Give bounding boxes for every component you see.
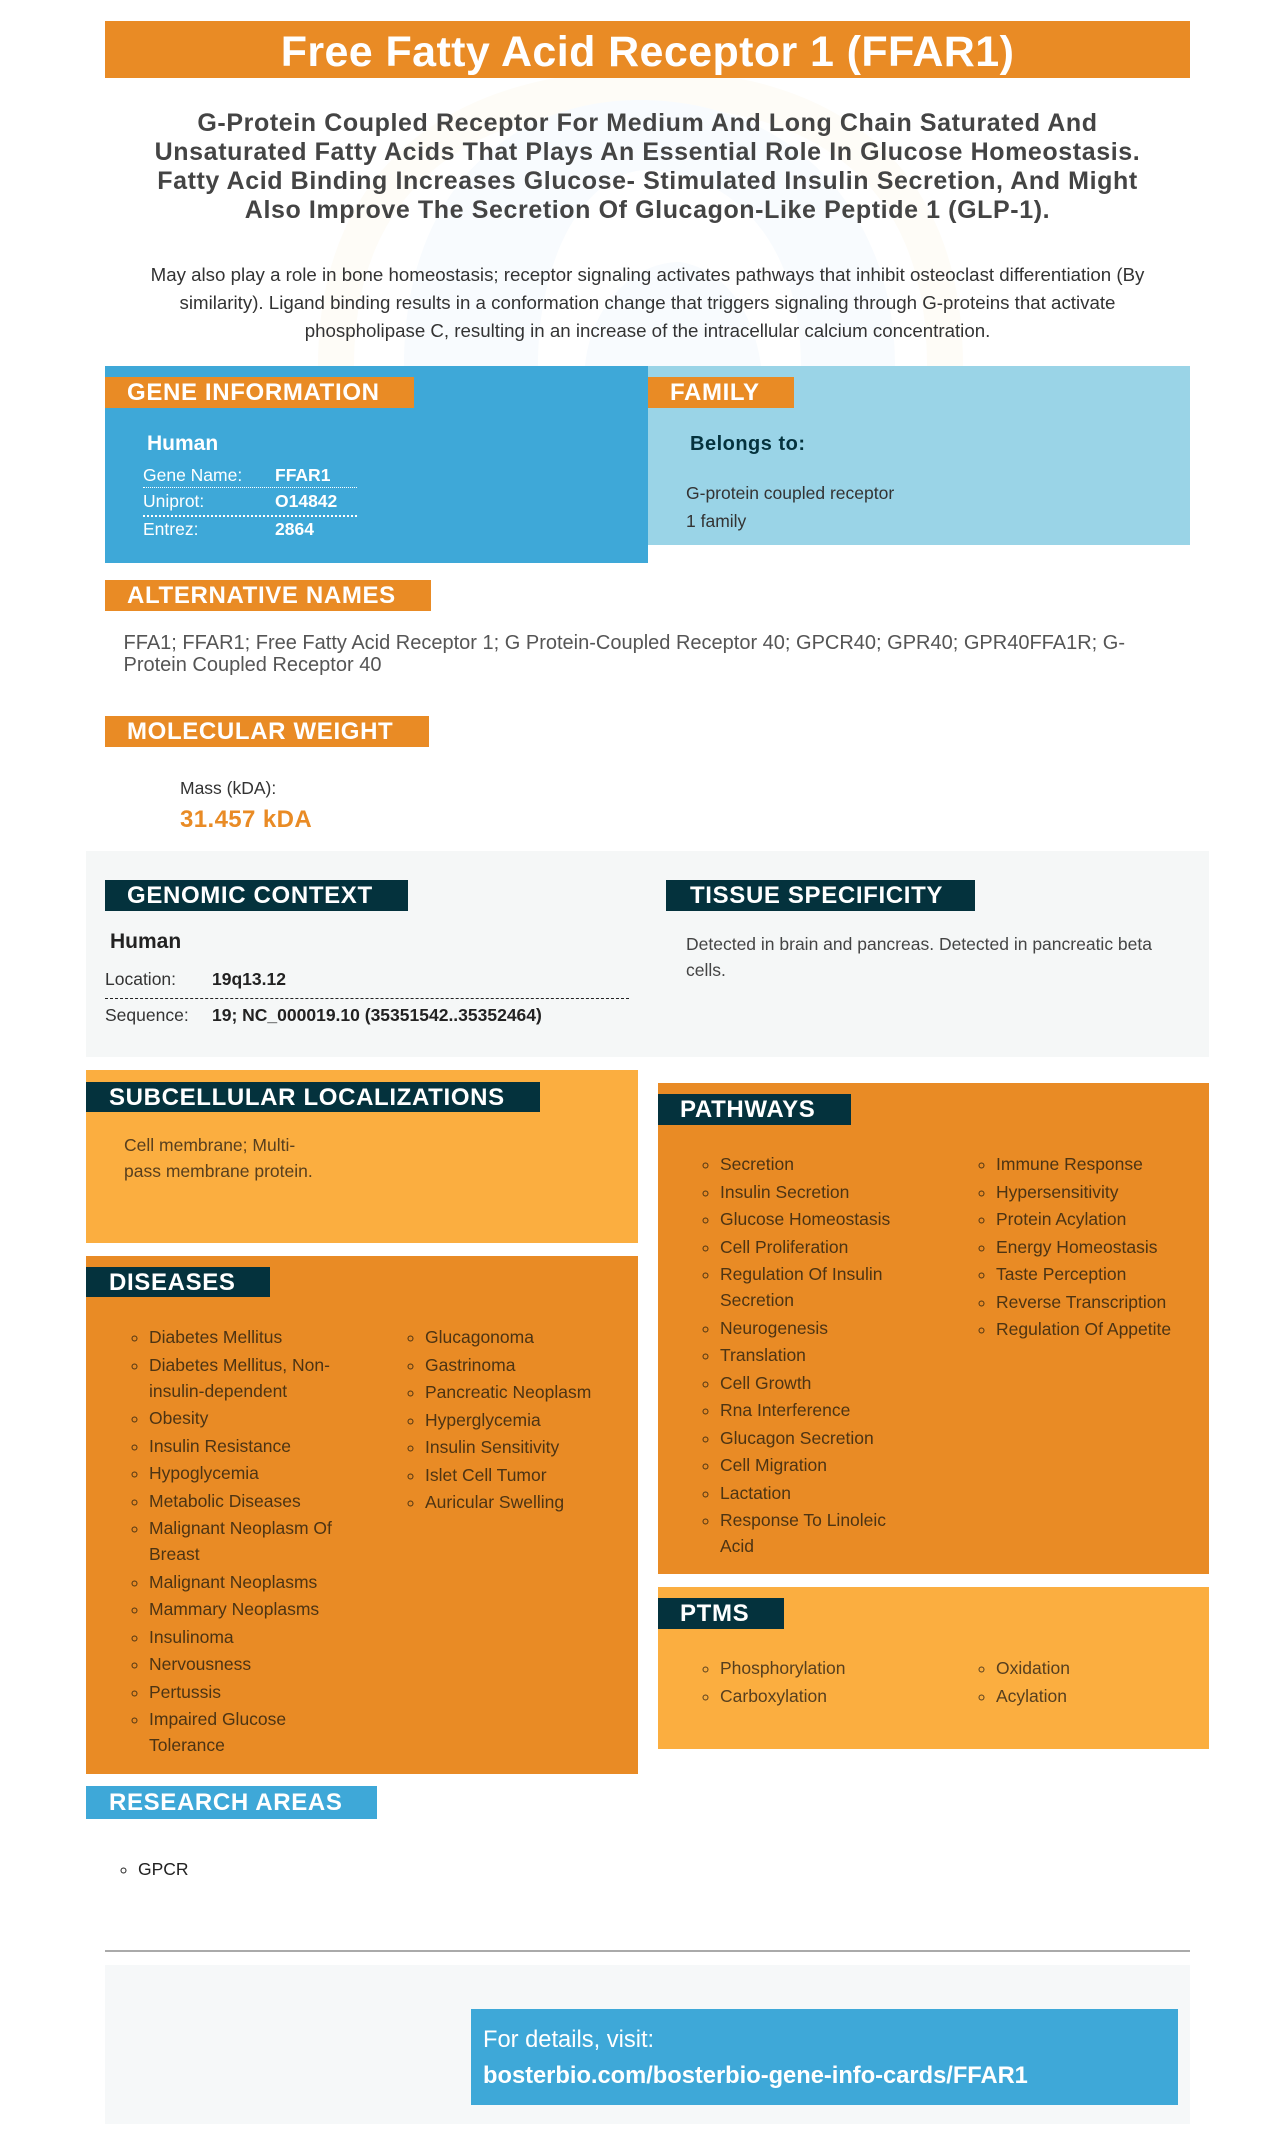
tissue specificity text: cells.	[686, 960, 726, 980]
location row: 19q13.12	[212, 969, 286, 989]
heading: pathways: PATHWAYS	[680, 1096, 815, 1123]
belongs to label: Belongs to:	[690, 433, 806, 455]
heading: research areas	[86, 1786, 377, 1819]
title banner	[105, 21, 1190, 78]
heading: genomic context: GENOMIC CONTEXT	[127, 882, 373, 909]
pathway list column 1: Regulation Of Insulin	[720, 1264, 882, 1284]
disease list column 1: Pertussis	[149, 1682, 221, 1702]
disease list column 1: Tolerance	[149, 1735, 225, 1755]
pathway list column 1: Neurogenesis	[720, 1318, 828, 1338]
family text: G-protein coupled receptor	[686, 483, 894, 503]
disease list column 1: Breast	[149, 1544, 200, 1564]
gene name row: Gene Name:	[143, 465, 242, 485]
pathway list column 2	[978, 1154, 1171, 1339]
function description	[151, 264, 1144, 341]
localization text: Cell membrane; Multi-	[124, 1135, 295, 1155]
disease list column 2: Islet Cell Tumor	[425, 1464, 547, 1484]
sequence row: Sequence:	[105, 1005, 189, 1025]
disease list column 1: Diabetes Mellitus, Non-	[149, 1354, 330, 1374]
pathway list column 1: Acid	[720, 1536, 754, 1556]
heading: subcellular localizations: SUBCELLULAR LOCALIZATIONS	[109, 1084, 505, 1111]
panel: ptms	[658, 1587, 1209, 1749]
disease list column 2: Gastrinoma	[425, 1354, 515, 1374]
disease list column 2: Insulin Sensitivity	[425, 1437, 559, 1457]
uniprot row: O14842	[275, 491, 337, 511]
family text: 1 family	[686, 511, 746, 531]
pathway list column 1: Rna Interference	[720, 1400, 850, 1420]
sequence row	[105, 1005, 542, 1025]
subtitle summary: G-Protein Coupled Receptor For Medium And Long Chain Saturated And	[197, 108, 1098, 136]
pathway list column 1: Response To Linoleic	[720, 1510, 886, 1530]
pathway list column 2: Protein Acylation	[996, 1209, 1126, 1229]
alternative names text	[124, 632, 1125, 676]
panel: footer	[105, 1965, 1190, 2124]
pathway list column 2: Immune Response	[996, 1154, 1143, 1174]
disease list column 2: Pancreatic Neoplasm	[425, 1382, 591, 1402]
disease list column 2: Auricular Swelling	[425, 1492, 564, 1512]
pathway list column 1: Insulin Secretion	[720, 1182, 849, 1202]
mass value: 31.457 kDA	[180, 806, 312, 833]
disease list column 1	[132, 1327, 332, 1755]
disease list column 1: Malignant Neoplasm Of	[149, 1518, 332, 1538]
pathway list column 2: Taste Perception	[996, 1264, 1126, 1284]
entrez row: 2864	[275, 519, 314, 539]
disease list column 2: Hyperglycemia	[425, 1410, 541, 1430]
species label: Human	[147, 432, 218, 455]
ptm list column 2: Oxidation	[996, 1658, 1070, 1678]
heading: alternative names: ALTERNATIVE NAMES	[127, 582, 396, 609]
heading: research areas: RESEARCH AREAS	[109, 1789, 343, 1816]
localization text	[124, 1135, 313, 1181]
disease list column 1: Insulinoma	[149, 1626, 234, 1646]
callout url: bosterbio.com/bosterbio-gene-info-cards/FFAR1	[483, 2063, 1028, 2089]
heading: family	[648, 377, 794, 408]
heading: ptms	[658, 1598, 784, 1629]
pathway list column 1: Secretion	[720, 1290, 794, 1310]
heading: family: FAMILY	[670, 379, 760, 406]
disease list column 1: Impaired Glucose	[149, 1709, 286, 1729]
footer rule	[105, 1950, 1190, 1952]
localization text: pass membrane protein.	[124, 1161, 313, 1181]
subtitle summary: Fatty Acid Binding Increases Glucose- Stimulated Insulin Secretion, And Might	[157, 166, 1138, 194]
ptm list column 2	[978, 1658, 1070, 1706]
pathway list column 1: Cell Growth	[720, 1372, 811, 1392]
subtitle summary: Also Improve The Secretion Of Glucagon-Like Peptide 1 (GLP-1).	[245, 196, 1050, 224]
callout label: For details, visit:	[483, 2027, 654, 2053]
function description: May also play a role in bone homeostasis; receptor signaling activates pathways that inhibit osteoclast differentiation (By	[151, 264, 1144, 285]
subtitle summary	[155, 108, 1140, 224]
ptm list column 1	[702, 1658, 846, 1706]
location row	[105, 969, 629, 999]
function description: similarity). Ligand binding results in a conformation change that triggers signaling through G-proteins that activate	[180, 292, 1115, 313]
ptm list column 1: Carboxylation	[720, 1686, 827, 1706]
disease list column 1: Nervousness	[149, 1654, 251, 1674]
panel: gene information	[105, 366, 648, 563]
entrez row	[143, 519, 314, 539]
panel: family	[648, 366, 1190, 545]
ptm list column 2: Acylation	[996, 1686, 1067, 1706]
pathway list column 1	[702, 1154, 890, 1556]
research area list: GPCR	[138, 1859, 189, 1879]
heading: tissue specificity: TISSUE SPECIFICITY	[690, 882, 943, 909]
pathway list column 1: Cell Proliferation	[720, 1236, 848, 1256]
pathway list column 2: Reverse Transcription	[996, 1292, 1166, 1312]
uniprot row	[143, 491, 357, 517]
panel: genomic context and tissue specificity	[86, 851, 1209, 1057]
gene name row	[143, 465, 357, 488]
uniprot row: Uniprot:	[143, 491, 204, 511]
pathway list column 1: Secretion	[720, 1154, 794, 1174]
gene name row: FFAR1	[275, 465, 330, 485]
pathway list column 1: Translation	[720, 1345, 806, 1365]
disease list column 1: Mammary Neoplasms	[149, 1599, 319, 1619]
disease list column 1: Diabetes Mellitus	[149, 1327, 282, 1347]
panel: diseases	[86, 1256, 638, 1774]
tissue specificity text	[686, 934, 1152, 980]
disease list column 1: Obesity	[149, 1408, 208, 1428]
pathway list column 1: Cell Migration	[720, 1455, 827, 1475]
pathway list column 1: Lactation	[720, 1482, 791, 1502]
pathway list column 1: Glucose Homeostasis	[720, 1209, 890, 1229]
location row: Location:	[105, 969, 176, 989]
pathway list column 1: Glucagon Secretion	[720, 1428, 874, 1448]
heading: molecular weight: MOLECULAR WEIGHT	[127, 718, 393, 745]
family text	[686, 483, 894, 531]
entrez row: Entrez:	[143, 519, 198, 539]
pathway list column 2: Regulation Of Appetite	[996, 1319, 1171, 1339]
ptm list column 1: Phosphorylation	[720, 1658, 846, 1678]
pathway list column 2: Energy Homeostasis	[996, 1236, 1157, 1256]
alternative names text: Protein Coupled Receptor 40	[124, 654, 381, 676]
panel: genomic context and tissue specificity: 19; NC_000019.10 (35351542..35352464)	[212, 1005, 542, 1025]
tissue specificity text: Detected in brain and pancreas. Detected in pancreatic beta	[686, 934, 1152, 954]
disease list column 1: Malignant Neoplasms	[149, 1572, 317, 1592]
disease list column 1: Metabolic Diseases	[149, 1490, 301, 1510]
disease list column 1: Hypoglycemia	[149, 1463, 259, 1483]
function description: phospholipase C, resulting in an increase of the intracellular calcium concentration.	[305, 320, 990, 341]
species label: Human	[110, 930, 181, 953]
title banner: Free Fatty Acid Receptor 1 (FFAR1)	[281, 28, 1014, 76]
heading: diseases	[86, 1267, 270, 1297]
disease list column 2	[408, 1327, 591, 1512]
alternative names text: FFA1; FFAR1; Free Fatty Acid Receptor 1; G Protein-Coupled Receptor 40; GPCR40; GPR40; GPR40FFA1R; G-	[124, 632, 1125, 654]
disease list column 1: insulin-dependent	[149, 1380, 287, 1400]
disease list column 2: Glucagonoma	[425, 1327, 534, 1347]
disease list column 1: Insulin Resistance	[149, 1436, 291, 1456]
callout: details link	[471, 2009, 1178, 2105]
subtitle summary: Unsaturated Fatty Acids That Plays An Essential Role In Glucose Homeostasis.	[155, 138, 1140, 166]
mass label: Mass (kDA):	[180, 778, 276, 798]
panel: subcellular localizations	[86, 1070, 638, 1243]
pathway list column 2: Hypersensitivity	[996, 1182, 1119, 1202]
heading: diseases: DISEASES	[109, 1269, 236, 1296]
heading: ptms: PTMS	[680, 1600, 749, 1627]
heading: pathways	[658, 1094, 851, 1125]
panel: pathways	[658, 1083, 1209, 1574]
heading: gene information: GENE INFORMATION	[127, 379, 380, 406]
